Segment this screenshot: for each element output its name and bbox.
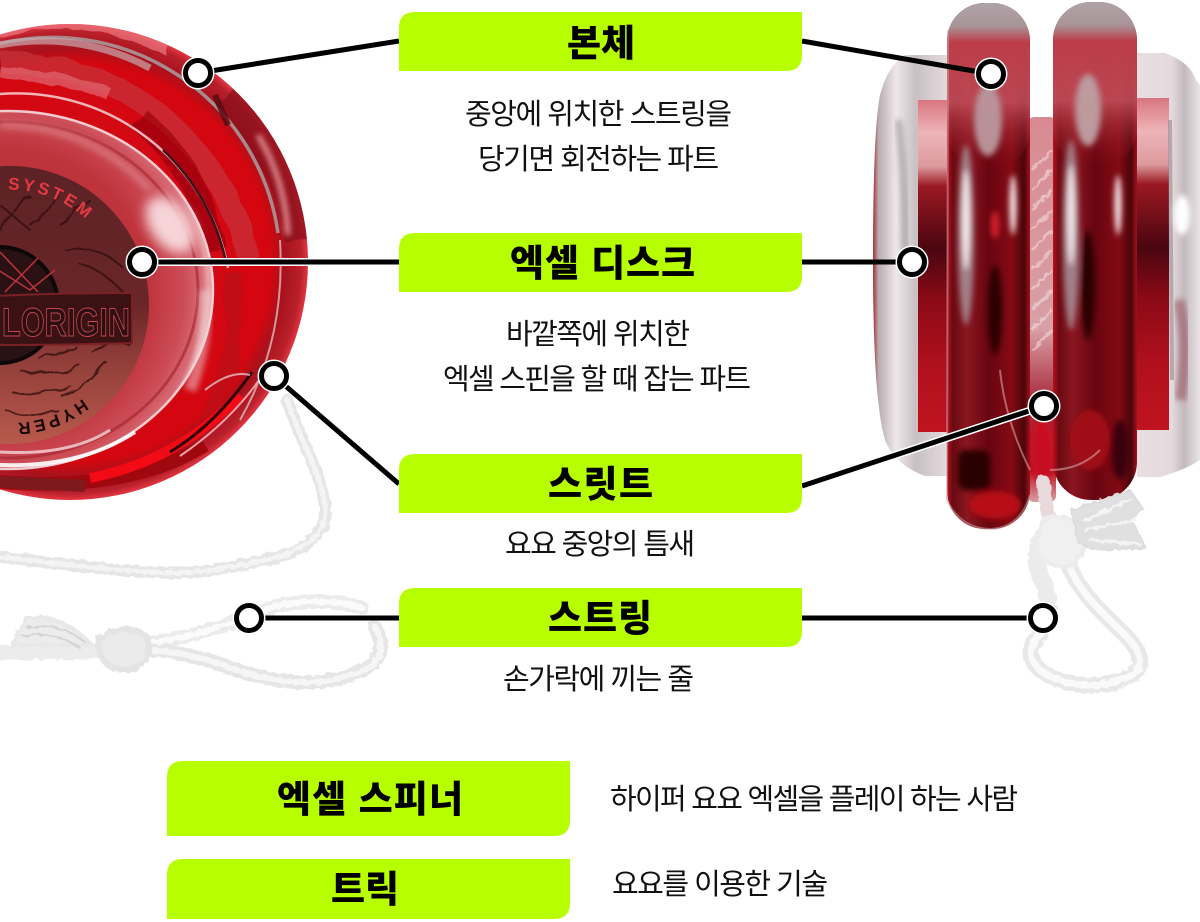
part: axel disc (399, 233, 802, 396)
part: body: 중앙에 위치한 스트링을 (465, 98, 732, 131)
glossary: axel spinner (167, 761, 1018, 836)
glossary: trick: 요요를 이용한 기술 (612, 869, 828, 901)
disc text: hyper: HYPER (18, 400, 88, 434)
logo text: LORIGIN (2, 301, 130, 345)
photo: yoyo side view (873, 2, 1200, 529)
part: string (399, 588, 802, 696)
part: axel disc: 엑셀 디스크 (510, 243, 695, 284)
part: string: 스트링 (548, 598, 652, 639)
glossary: axel spinner: 엑셀 스피너 (277, 779, 463, 820)
glossary: trick (167, 859, 828, 919)
part: axel disc: 바깥쪽에 위치한 (506, 318, 690, 351)
leader lines (142, 41, 1044, 618)
photo: string of front yoyo (0, 400, 381, 682)
disc text: system: SYSTEM (8, 178, 92, 218)
part: slit: 스릿트 (548, 464, 653, 505)
part: body: 당기면 회전하는 파트 (478, 143, 719, 176)
photo: string of side yoyo (1031, 482, 1146, 685)
part: body (399, 12, 802, 176)
part: slit (399, 454, 802, 561)
glossary: axel spinner: 하이퍼 요요 엑셀을 플레이 하는 사람 (610, 783, 1018, 816)
part: string: 손가락에 끼는 줄 (503, 664, 694, 696)
photo: yoyo front view (0, 24, 308, 500)
part: axel disc: 엑셀 스핀을 할 때 잡는 파트 (443, 363, 751, 396)
glossary: trick: 트릭 (331, 869, 399, 910)
marker dots (126, 56, 1060, 634)
part: slit: 요요 중앙의 틈새 (505, 529, 695, 561)
part: body: 본체 (567, 23, 635, 64)
